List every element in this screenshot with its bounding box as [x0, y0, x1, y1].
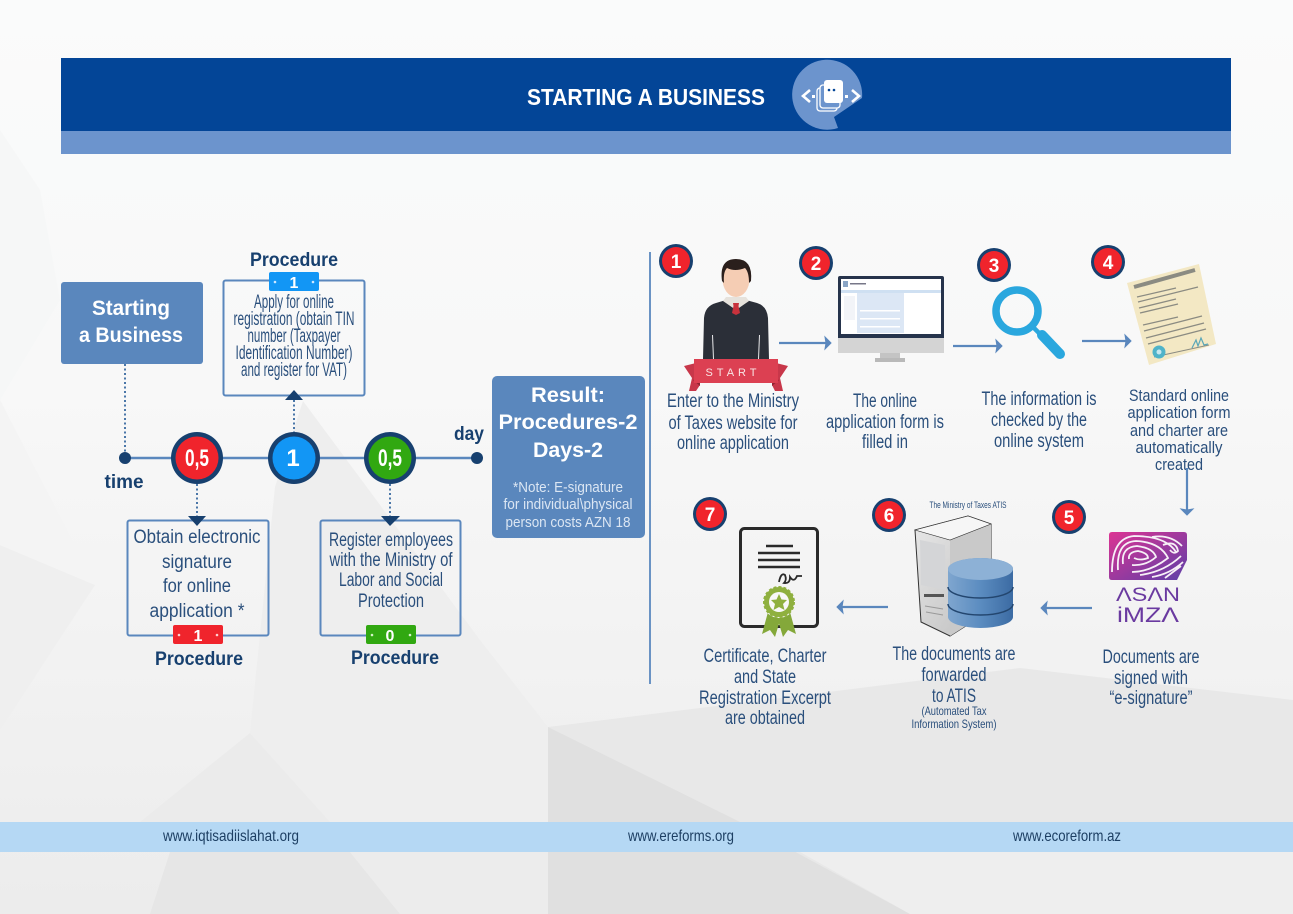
badge 4: 4 — [1103, 253, 1114, 274]
header band — [61, 58, 1231, 154]
badge 6: 6 — [884, 506, 894, 527]
note — [504, 479, 632, 531]
panel: procedure register employees: Register employees — [329, 530, 453, 551]
panel: procedure 1 online registration: Apply for online — [254, 292, 334, 313]
arrow 2 to 3 — [953, 340, 1002, 352]
step 4 text: Standard online — [1129, 386, 1229, 405]
milestone: 0,5 green — [364, 432, 416, 484]
icon: asan imza logo — [1109, 532, 1187, 627]
step 4 text: application form — [1128, 403, 1230, 422]
divider — [649, 252, 651, 684]
step 1 text — [667, 391, 799, 454]
arrows between steps — [779, 335, 1193, 614]
badge 7: 7 — [705, 505, 715, 526]
icon: computer monitor with form — [838, 276, 944, 362]
milestone: 0,5 red — [171, 432, 223, 484]
panel: result: Procedures-2 — [498, 411, 638, 434]
note: for individual\physical — [504, 496, 632, 513]
panel: procedure 1 online registration: number (Taxpayer — [248, 326, 341, 347]
step 7 text: Registration Excerpt — [699, 688, 832, 709]
step 5 text: Documents are — [1102, 647, 1200, 668]
icon: person with start ribbon — [684, 259, 788, 391]
step 7 text: are obtained — [725, 708, 805, 729]
note: person costs AZN 18 — [506, 514, 630, 531]
milestone: 0,5 red: 0,5 — [185, 445, 209, 472]
panel: procedure register employees: with the Ministry of — [329, 550, 453, 571]
icon: server with database — [915, 500, 1013, 636]
badge 5: 5 — [1064, 508, 1075, 529]
heading: Procedure — [351, 648, 439, 669]
timeline — [104, 364, 484, 518]
count tag — [269, 272, 319, 292]
panel: procedure 1 online registration: Identification Number) — [236, 343, 352, 364]
icon: asan imza logo: iMZΛ — [1117, 604, 1179, 627]
panel: starting a business label: Starting — [92, 297, 170, 320]
panel: procedure 1 online registration — [224, 250, 364, 400]
arrow 3 to 4 — [1082, 335, 1131, 347]
step 3 text — [982, 389, 1096, 452]
panel: result: Days-2 — [533, 439, 603, 462]
panel: procedure electronic signature — [128, 516, 268, 670]
count tag — [366, 625, 416, 645]
milestone: 1 blue — [268, 432, 320, 484]
badge 1 — [659, 244, 693, 278]
panel: procedure register employees: Labor and Social — [339, 570, 443, 591]
badge 3 — [977, 248, 1011, 282]
step 4 text — [1128, 386, 1230, 474]
count tag — [173, 625, 223, 645]
count tag: 0 — [386, 628, 395, 645]
step 6 text: forwarded — [922, 665, 986, 686]
step 1 text: of Taxes website for — [668, 413, 798, 434]
panel: procedure 1 online registration: registration (obtain TIN — [234, 309, 354, 330]
panel: procedure electronic signature: signature — [162, 552, 232, 573]
step 3 text: The information is — [982, 389, 1096, 410]
icon: code documents — [792, 60, 862, 130]
arrow 5 to 6 — [1041, 602, 1092, 614]
panel: procedure register employees: Protection — [358, 591, 424, 612]
panel: procedure electronic signature: for online — [163, 576, 231, 597]
panel: starting a business label: a Business — [79, 324, 183, 347]
badge 4 — [1091, 245, 1125, 279]
arrow 4 to 5 — [1181, 468, 1193, 515]
count tag: 1 — [290, 275, 299, 292]
ribbon text: START — [705, 367, 761, 379]
heading: Procedure — [250, 250, 338, 271]
badge 5 — [1052, 500, 1086, 534]
panel: procedure 1 online registration: and register for VAT) — [241, 360, 347, 381]
footer band: www.iqtisadiislahat.org — [162, 828, 299, 845]
milestone: 0,5 green: 0,5 — [378, 445, 402, 472]
panel: starting a business label — [61, 282, 203, 364]
step 4 text: created — [1155, 455, 1203, 474]
logo text: ΛSΛN — [1116, 585, 1180, 606]
badge 6 — [872, 498, 906, 532]
arrow 6 to 7 — [837, 601, 888, 613]
step 6 text: (Automated Tax — [922, 704, 986, 718]
step 3 text: online system — [994, 431, 1084, 452]
step 1 text: Enter to the Ministry — [667, 391, 799, 412]
count tag: 1 — [194, 628, 203, 645]
step 4 text: and charter are — [1130, 421, 1228, 440]
arrow 1 to 2 — [779, 337, 831, 349]
title: STARTING A BUSINESS — [527, 84, 765, 110]
step 3 text: checked by the — [991, 410, 1087, 431]
footer band: www.ecoreform.az — [1012, 828, 1121, 845]
icon: magnifier — [996, 290, 1060, 354]
step 7 text: Certificate, Charter — [704, 646, 827, 667]
heading: Procedure — [155, 649, 243, 670]
panel: result — [492, 376, 645, 538]
step 5 text: “e-signature” — [1110, 688, 1192, 709]
badge 3: 3 — [989, 256, 999, 277]
step 5 text — [1102, 647, 1200, 709]
footer band — [0, 822, 1293, 852]
step 2 text: filled in — [862, 432, 908, 453]
note: *Note: E-signature — [513, 479, 623, 496]
caption: The Ministry of Taxes ATIS — [930, 500, 1006, 510]
icon: signed document — [1127, 264, 1216, 365]
badge 7 — [693, 497, 727, 531]
step 6 text: to ATIS — [932, 686, 976, 707]
milestone: 1 blue: 1 — [286, 445, 300, 472]
badge 2: 2 — [811, 254, 821, 275]
badge 1: 1 — [671, 252, 682, 273]
panel: procedure register employees — [320, 516, 460, 669]
step 2 text — [826, 391, 944, 453]
step 7 text — [699, 646, 832, 729]
step 6 text: The documents are — [892, 644, 1016, 665]
footer band: www.ereforms.org — [627, 828, 734, 845]
step 2 text: The online — [853, 391, 917, 412]
panel: procedure electronic signature: application * — [150, 601, 245, 622]
step 6 text — [892, 644, 1016, 731]
time label: time — [104, 472, 144, 493]
step 1 text: online application — [677, 433, 789, 454]
step 6 text: Information System) — [912, 717, 996, 731]
step 4 text: automatically — [1136, 438, 1223, 457]
step 2 text: application form is — [826, 412, 944, 433]
step badges — [659, 244, 1125, 534]
panel: procedure electronic signature: Obtain electronic — [134, 527, 260, 548]
panel: result: Result: — [531, 384, 605, 407]
icon: certificate with seal — [740, 528, 818, 637]
step 7 text: and State — [734, 667, 796, 688]
step 5 text: signed with — [1114, 668, 1188, 689]
badge 2 — [799, 246, 833, 280]
day label: day — [454, 424, 484, 445]
